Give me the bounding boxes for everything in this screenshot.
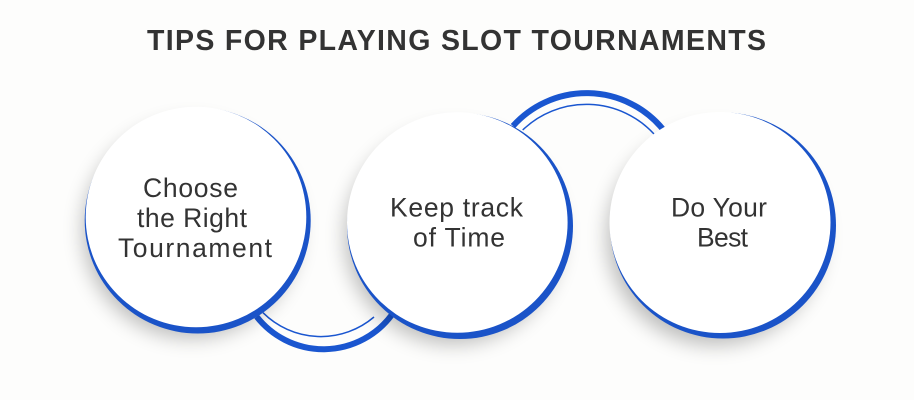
- label: Choose the Right Tournament: Tournament: [118, 233, 273, 263]
- label: Do Your Best: [671, 192, 767, 252]
- connector arc: top: [513, 93, 663, 134]
- label: Keep track of Time: Keep track: [390, 192, 524, 222]
- label: Choose the Right Tournament: [118, 173, 273, 263]
- label: Choose the Right Tournament: the Right: [137, 203, 248, 233]
- label: Do Your Best: Do Your: [671, 192, 767, 222]
- label: Keep track of Time: of Time: [413, 222, 505, 252]
- circle 3: Do Your Best: [607, 112, 836, 345]
- label: Keep track of Time: [390, 192, 524, 252]
- connector arc: bottom: [257, 313, 392, 349]
- label: Choose the Right Tournament: Choose: [143, 173, 238, 203]
- circle 2: Keep track of Time: [345, 112, 573, 344]
- label: Do Your Best: Best: [697, 222, 749, 252]
- circle 1: Choose the Right Tournament: [83, 107, 311, 338]
- title: TIPS FOR PLAYING SLOT TOURNAMENTS: [147, 25, 766, 57]
